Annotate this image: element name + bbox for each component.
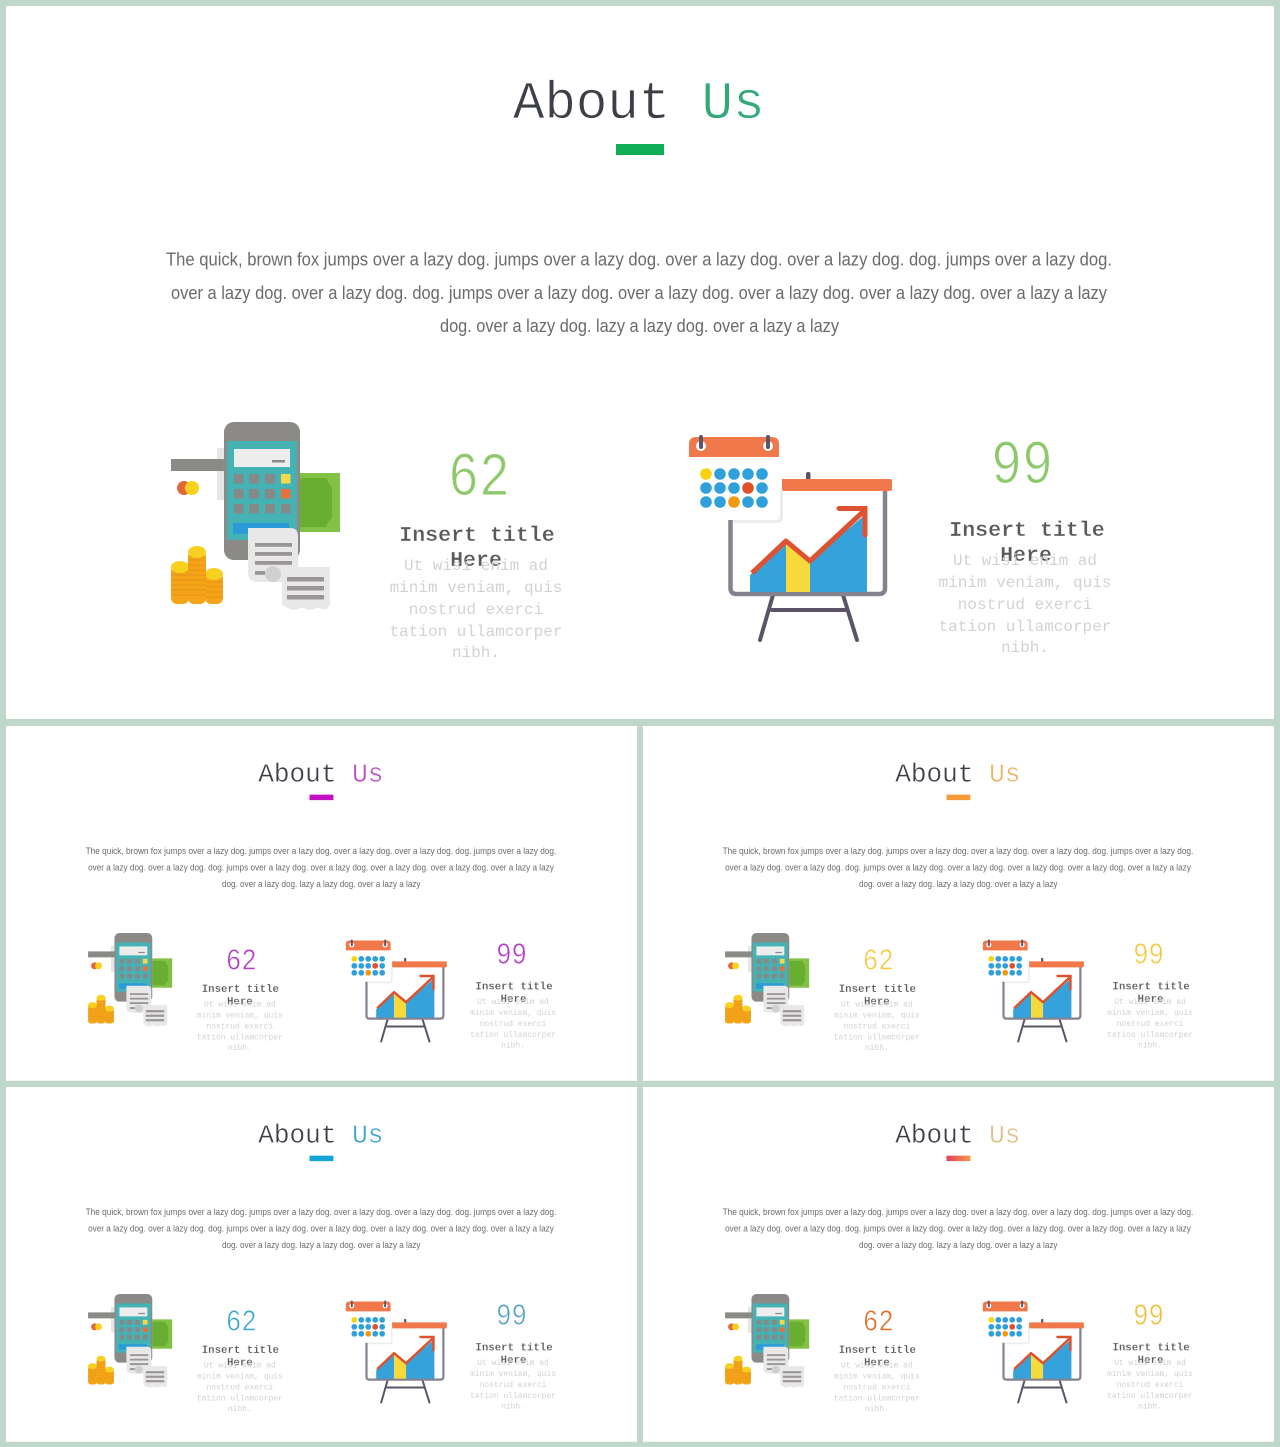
panel: purple slide <box>6 726 637 1081</box>
block text right: minim veniam, quis <box>1107 1370 1193 1379</box>
block text left: nibh. <box>865 1044 889 1053</box>
block text right: tation ullamcorper <box>470 1392 556 1401</box>
intro paragraph: over a lazy dog. over a lazy dog. dog. jumps over a lazy dog. over a lazy dog. over a lazy dog. over a lazy dog. over a lazy a lazy <box>88 1224 554 1234</box>
block title right: Here <box>1000 544 1052 568</box>
stat: 62: 62 <box>226 1305 257 1340</box>
block text left: tation ullamcorper <box>197 1033 283 1042</box>
block title right: Insert title <box>949 519 1105 543</box>
block title left: Insert title <box>202 984 279 996</box>
block title left: Here <box>227 1358 253 1370</box>
block text right: tation ullamcorper <box>1107 1392 1193 1401</box>
stat: 99: 99 <box>496 1299 527 1334</box>
block text right: tation ullamcorper <box>1107 1031 1193 1040</box>
block title left: Insert title <box>839 1345 916 1357</box>
block title left: Here <box>864 997 890 1009</box>
block text left: tation ullamcorper <box>834 1394 920 1403</box>
intro paragraph: over a lazy dog. over a lazy dog. dog. jumps over a lazy dog. over a lazy dog. over a lazy dog. over a lazy dog. over a lazy a lazy <box>725 1224 1191 1234</box>
title: About Us <box>513 74 765 134</box>
block text left: nibh. <box>865 1405 889 1414</box>
block title right: Insert title <box>1112 982 1190 994</box>
block title right: Here <box>1138 1355 1163 1367</box>
block title right: Here <box>501 994 526 1006</box>
icon: payment terminal with coins <box>88 933 172 1027</box>
intro paragraph <box>86 1207 556 1250</box>
stat: 99: 99 <box>1133 938 1164 973</box>
block title right: Here <box>1138 994 1163 1006</box>
icon: payment terminal with coins <box>725 933 809 1027</box>
title: About Us <box>895 1121 1020 1151</box>
accent bar <box>616 144 664 155</box>
block text right: nostrud exerci <box>1117 1381 1184 1390</box>
title: About Us <box>258 760 383 790</box>
icon: payment terminal with coins <box>88 1294 172 1388</box>
intro paragraph <box>723 846 1193 889</box>
icon: calendar and growth chart board <box>689 437 892 640</box>
block text right: minim veniam, quis <box>470 1009 556 1018</box>
block text left: nostrud exerci <box>409 601 543 619</box>
block text right: nostrud exerci <box>1117 1020 1184 1029</box>
block text right: tation ullamcorper <box>470 1031 556 1040</box>
block text right: minim veniam, quis <box>1107 1009 1193 1018</box>
block text left: minim veniam, quis <box>197 1012 283 1021</box>
block text right: Ut wisi enim ad <box>477 998 549 1007</box>
icon: calendar and growth chart board <box>983 1301 1084 1402</box>
block text left: nibh. <box>228 1044 252 1053</box>
block title right: Insert title <box>1112 1343 1190 1355</box>
stat: 62: 62 <box>863 1305 894 1340</box>
accent bar <box>310 795 333 800</box>
title: About Us <box>895 760 1020 790</box>
block text left: Ut wisi enim ad <box>204 1362 276 1371</box>
intro paragraph <box>723 1207 1193 1250</box>
intro paragraph: over a lazy dog. over a lazy dog. dog. jumps over a lazy dog. over a lazy dog. over a lazy dog. over a lazy dog. over a lazy a lazy <box>725 863 1191 873</box>
block text right: nostrud exerci <box>480 1020 547 1029</box>
stat: 62: 62 <box>863 944 894 979</box>
block text left: nostrud exerci <box>206 1023 273 1032</box>
intro paragraph: The quick, brown fox jumps over a lazy dog. jumps over a lazy dog. over a lazy dog. over a lazy dog. dog. jumps over a lazy dog. <box>723 846 1193 856</box>
block text left: nostrud exerci <box>843 1023 910 1032</box>
icon: calendar and growth chart board <box>983 940 1084 1041</box>
block title left: Insert title <box>839 984 916 996</box>
block text right: nibh. <box>1138 1402 1162 1411</box>
block text left: tation ullamcorper <box>197 1394 283 1403</box>
block text right: Ut wisi enim ad <box>953 552 1097 570</box>
stat: 99: 99 <box>496 938 527 973</box>
intro paragraph <box>166 248 1112 336</box>
block text right: minim veniam, quis <box>939 574 1111 592</box>
accent bar <box>947 795 970 800</box>
block title right: Here <box>501 1355 526 1367</box>
block text right: nibh. <box>1001 639 1049 657</box>
intro paragraph: The quick, brown fox jumps over a lazy dog. jumps over a lazy dog. over a lazy dog. over a lazy dog. dog. jumps over a lazy dog. <box>166 248 1112 270</box>
block text left: nostrud exerci <box>843 1384 910 1393</box>
icon: payment terminal with coins <box>171 422 340 610</box>
intro paragraph: dog. over a lazy dog. lazy a lazy dog. over a lazy a lazy <box>440 315 840 336</box>
block text right: nibh. <box>501 1402 525 1411</box>
stat: 62: 62 <box>226 944 257 979</box>
intro paragraph: The quick, brown fox jumps over a lazy dog. jumps over a lazy dog. over a lazy dog. over a lazy dog. dog. jumps over a lazy dog. <box>86 1207 556 1217</box>
block text right: Ut wisi enim ad <box>477 1359 549 1368</box>
panel: blue slide <box>6 1087 637 1442</box>
block text right: nibh. <box>1138 1041 1162 1050</box>
block title left: Here <box>864 1358 890 1370</box>
panel: red-orange slide <box>643 1087 1274 1442</box>
title: About Us <box>258 1121 383 1151</box>
block text right: nibh. <box>501 1041 525 1050</box>
stat: 99: 99 <box>1133 1299 1164 1334</box>
intro paragraph: over a lazy dog. over a lazy dog. dog. jumps over a lazy dog. over a lazy dog. over a lazy dog. over a lazy dog. over a lazy a lazy <box>88 863 554 873</box>
block text left: Ut wisi enim ad <box>841 1362 913 1371</box>
stat: 99: 99 <box>991 431 1053 502</box>
intro paragraph: dog. over a lazy dog. lazy a lazy dog. over a lazy a lazy <box>222 1240 421 1250</box>
block text left: minim veniam, quis <box>834 1373 920 1382</box>
block text right: tation ullamcorper <box>939 618 1111 636</box>
block title left: Here <box>450 549 502 573</box>
block text left: minim veniam, quis <box>834 1012 920 1021</box>
panel: main green slide <box>6 6 1274 719</box>
block text left: nibh. <box>228 1405 252 1414</box>
block text left: Ut wisi enim ad <box>204 1001 276 1010</box>
block text right: nostrud exerci <box>480 1381 547 1390</box>
block text left: Ut wisi enim ad <box>404 557 548 575</box>
intro paragraph: dog. over a lazy dog. lazy a lazy dog. over a lazy a lazy <box>859 879 1058 889</box>
block text left: minim veniam, quis <box>390 579 562 597</box>
block title left: Insert title <box>399 524 555 548</box>
block text right: minim veniam, quis <box>470 1370 556 1379</box>
block title left: Insert title <box>202 1345 279 1357</box>
block text right: Ut wisi enim ad <box>1114 1359 1186 1368</box>
intro paragraph <box>86 846 556 889</box>
block text left: tation ullamcorper <box>834 1033 920 1042</box>
block text left: Ut wisi enim ad <box>841 1001 913 1010</box>
accent bar <box>947 1156 970 1161</box>
block text left: nostrud exerci <box>206 1384 273 1393</box>
block text left: nibh. <box>452 644 500 662</box>
block text right: Ut wisi enim ad <box>1114 998 1186 1007</box>
block text left: tation ullamcorper <box>390 623 562 641</box>
stat: 62: 62 <box>448 443 510 514</box>
intro paragraph: The quick, brown fox jumps over a lazy dog. jumps over a lazy dog. over a lazy dog. over a lazy dog. dog. jumps over a lazy dog. <box>723 1207 1193 1217</box>
icon: calendar and growth chart board <box>346 1301 447 1402</box>
accent bar <box>310 1156 333 1161</box>
panel: orange slide <box>643 726 1274 1081</box>
intro paragraph: The quick, brown fox jumps over a lazy dog. jumps over a lazy dog. over a lazy dog. over a lazy dog. dog. jumps over a lazy dog. <box>86 846 556 856</box>
block title right: Insert title <box>475 982 553 994</box>
block text right: nostrud exerci <box>958 596 1092 614</box>
block title left: Here <box>227 997 253 1009</box>
intro paragraph: dog. over a lazy dog. lazy a lazy dog. over a lazy a lazy <box>222 879 421 889</box>
intro paragraph: dog. over a lazy dog. lazy a lazy dog. over a lazy a lazy <box>859 1240 1058 1250</box>
icon: payment terminal with coins <box>725 1294 809 1388</box>
intro paragraph: over a lazy dog. over a lazy dog. dog. jumps over a lazy dog. over a lazy dog. over a lazy dog. over a lazy dog. over a lazy a lazy <box>171 282 1108 303</box>
block title right: Insert title <box>475 1343 553 1355</box>
icon: calendar and growth chart board <box>346 940 447 1041</box>
block text left: minim veniam, quis <box>197 1373 283 1382</box>
